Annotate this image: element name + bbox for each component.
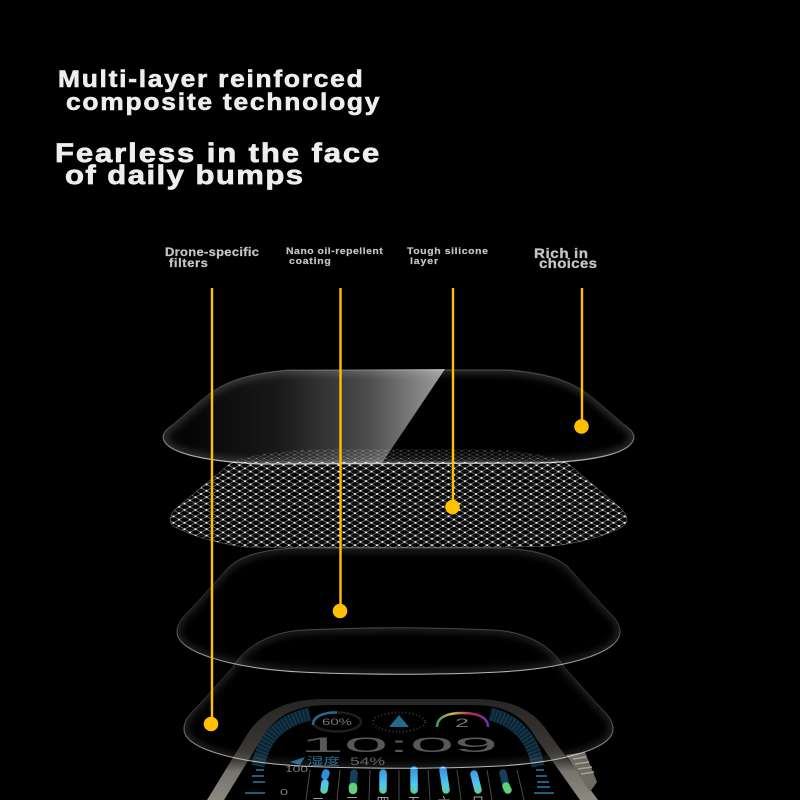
- layer 1: top glass panel: [163, 369, 634, 464]
- weekly bar chart: [324, 770, 508, 790]
- label: nano oil-repellent coating: [286, 246, 384, 267]
- chart scale labels: 0: [280, 788, 289, 797]
- humidity ring 60%: 60%: [322, 717, 352, 727]
- glass light reflection: [163, 369, 445, 464]
- mesh main section: [170, 462, 627, 548]
- watch case: [207, 699, 598, 800]
- right gauge arc: [490, 714, 538, 766]
- callout line: drone-specific filters: [204, 288, 218, 731]
- compass dial: [373, 712, 425, 732]
- weekday labels: [313, 796, 482, 800]
- layer 3: tough film: [177, 548, 620, 674]
- label: drone-specific filters: filters: [169, 256, 208, 270]
- chart column dividers: [306, 770, 524, 800]
- time 10:09: 10:09: [300, 734, 498, 757]
- label: rich in choices: [534, 246, 597, 272]
- subtitle: fearless in the face of daily bumps: [55, 139, 379, 190]
- UV ring: [437, 713, 488, 730]
- humidity reading: [290, 756, 384, 766]
- label: nano oil-repellent coating: Nano oil-repellent: [286, 246, 384, 257]
- label: drone-specific filters: Drone-specific: [165, 245, 259, 259]
- label: tough silicone layer: [407, 246, 488, 267]
- UV ring: 2: [455, 716, 470, 730]
- chart scale labels: [280, 766, 308, 795]
- humidity reading: 湿度: [307, 754, 340, 768]
- left gauge arc: [258, 714, 310, 766]
- callout line: rich in choices: [574, 288, 589, 434]
- humidity reading: 54%: [350, 756, 385, 768]
- side tick marks: [245, 770, 554, 793]
- callout line: tough silicone layer: [445, 288, 460, 514]
- label: tough silicone layer: layer: [410, 256, 438, 267]
- humidity ring 60%: [313, 712, 361, 732]
- label: tough silicone layer: Tough silicone: [407, 246, 488, 257]
- mesh back section: [232, 449, 566, 462]
- label: rich in choices: Rich in: [534, 246, 588, 262]
- label: rich in choices: choices: [539, 256, 597, 272]
- subtitle: fearless in the face of daily bumps: of daily bumps: [65, 161, 303, 190]
- label: drone-specific filters: [165, 245, 259, 270]
- layer 4: tempered film over the watch: [184, 628, 613, 768]
- label: nano oil-repellent coating: coating: [289, 256, 331, 267]
- title: multi-layer reinforced composite technology: [58, 66, 379, 116]
- subtitle: fearless in the face of daily bumps: Fearless in the face: [55, 139, 379, 168]
- watch: device under the protective layers: [207, 699, 598, 800]
- watch crown: [566, 752, 597, 792]
- layer 2: mesh layer: [170, 449, 627, 548]
- callout line: nano oil-repellent coating: [333, 288, 347, 618]
- chart scale labels: 100: [285, 765, 309, 774]
- title: multi-layer reinforced composite technology: composite technology: [66, 89, 379, 116]
- title: multi-layer reinforced composite technology: Multi-layer reinforced: [58, 66, 363, 93]
